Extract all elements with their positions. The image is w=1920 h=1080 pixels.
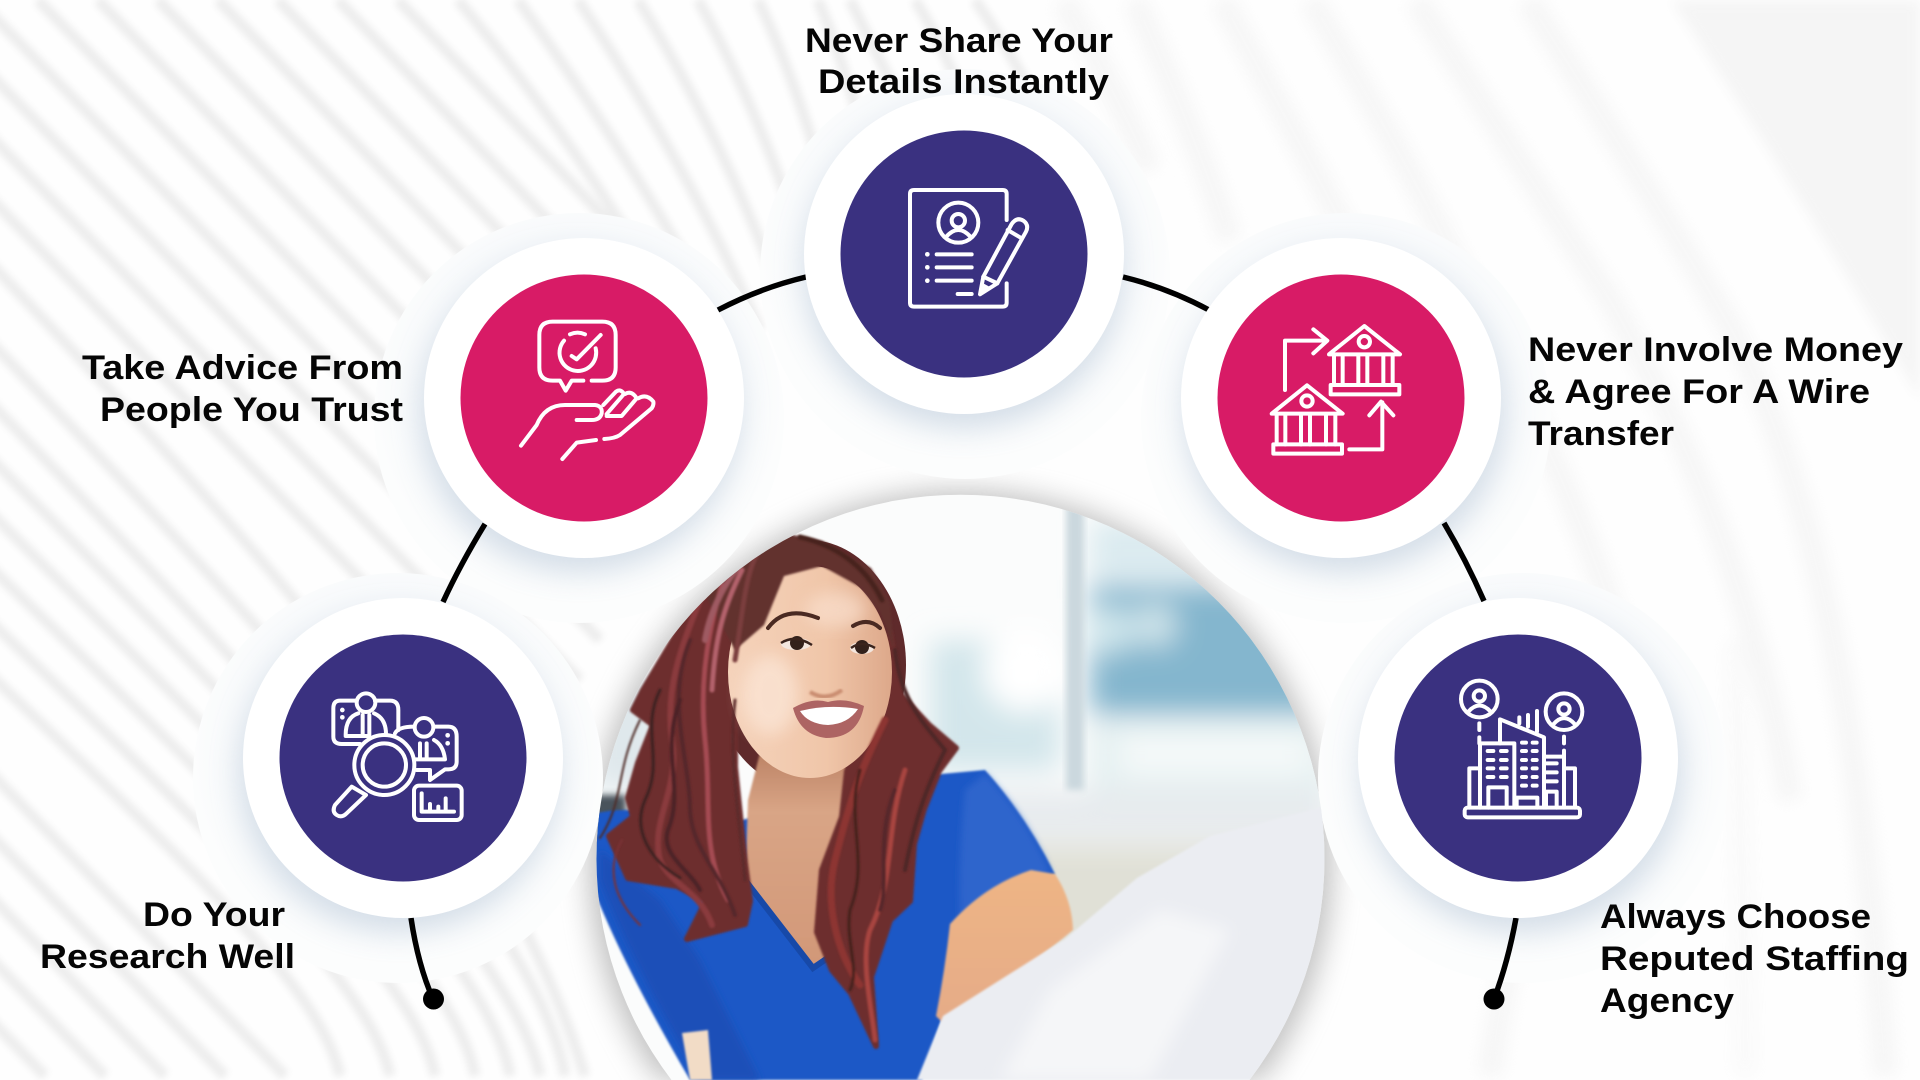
- icon: banks with transfer arrows: [1272, 326, 1400, 454]
- icon: resume with pencil: [910, 190, 1027, 307]
- icon: magnifier over profiles: [333, 693, 462, 820]
- arc: take advice to share details: [718, 277, 806, 310]
- panel: never share your details: [804, 94, 1124, 414]
- pink disc: [460, 274, 708, 522]
- label: do your research: [40, 896, 295, 976]
- arc: research to advice: [443, 524, 485, 602]
- connector arcs: [411, 277, 1516, 999]
- label: do your research: Do Your: [143, 896, 285, 934]
- label: never involve money: & Agree For A Wire: [1528, 373, 1870, 411]
- face: [728, 566, 892, 778]
- label: never involve money: [1528, 331, 1903, 453]
- arc: research tail: [411, 918, 433, 999]
- hair: left mass: [609, 587, 764, 939]
- end dot left: [423, 988, 444, 1010]
- end dot right: [1484, 988, 1504, 1010]
- panel: always choose reputed agency: [1358, 598, 1678, 918]
- hair: back: [736, 540, 906, 772]
- label: never involve money: Never Involve Money: [1528, 331, 1903, 369]
- hair: right mass: [817, 633, 956, 1046]
- label: take advice: People You Trust: [100, 391, 403, 429]
- white ring: [804, 94, 1124, 414]
- label: do your research: Research Well: [40, 938, 295, 976]
- label: never share: Never Share Your: [805, 22, 1113, 60]
- icon: hand with speech bubble: [521, 322, 653, 459]
- photo: smiling nurse shaking hands: [590, 490, 1330, 1080]
- label: always choose: [1600, 898, 1909, 1020]
- hair: crown: [701, 530, 894, 650]
- icon: buildings with people: [1461, 681, 1582, 817]
- label: always choose: Reputed Staffing: [1600, 940, 1909, 978]
- white sleeve: [916, 836, 1324, 1080]
- white ring: [1358, 598, 1678, 918]
- arm and hand: [936, 870, 1073, 1025]
- arc: share details to money: [1123, 277, 1209, 310]
- halo discs behind the circles: [193, 69, 1728, 983]
- purple disc: [840, 130, 1088, 378]
- white ring: [1181, 238, 1501, 558]
- label: never involve money: Transfer: [1528, 415, 1674, 453]
- label: take advice: Take Advice From: [82, 349, 403, 387]
- label: always choose: Agency: [1600, 982, 1734, 1020]
- arc: agency tail: [1494, 918, 1516, 999]
- pink disc: [1218, 274, 1464, 522]
- panel: never involve money: [1181, 238, 1501, 558]
- label: never share: Details Instantly: [818, 63, 1109, 101]
- white ring: [243, 598, 563, 918]
- purple disc: [1394, 634, 1642, 882]
- face details: [768, 613, 818, 628]
- label: take advice: [82, 349, 403, 429]
- panel: take advice: [424, 238, 744, 558]
- photo shadow: [589, 490, 1332, 1080]
- arc: money to agency: [1444, 523, 1484, 601]
- purple disc: [280, 634, 526, 882]
- label: never share: [805, 22, 1113, 101]
- label: always choose: Always Choose: [1600, 898, 1871, 936]
- panel: do your research: [243, 598, 563, 918]
- white ring: [424, 238, 744, 558]
